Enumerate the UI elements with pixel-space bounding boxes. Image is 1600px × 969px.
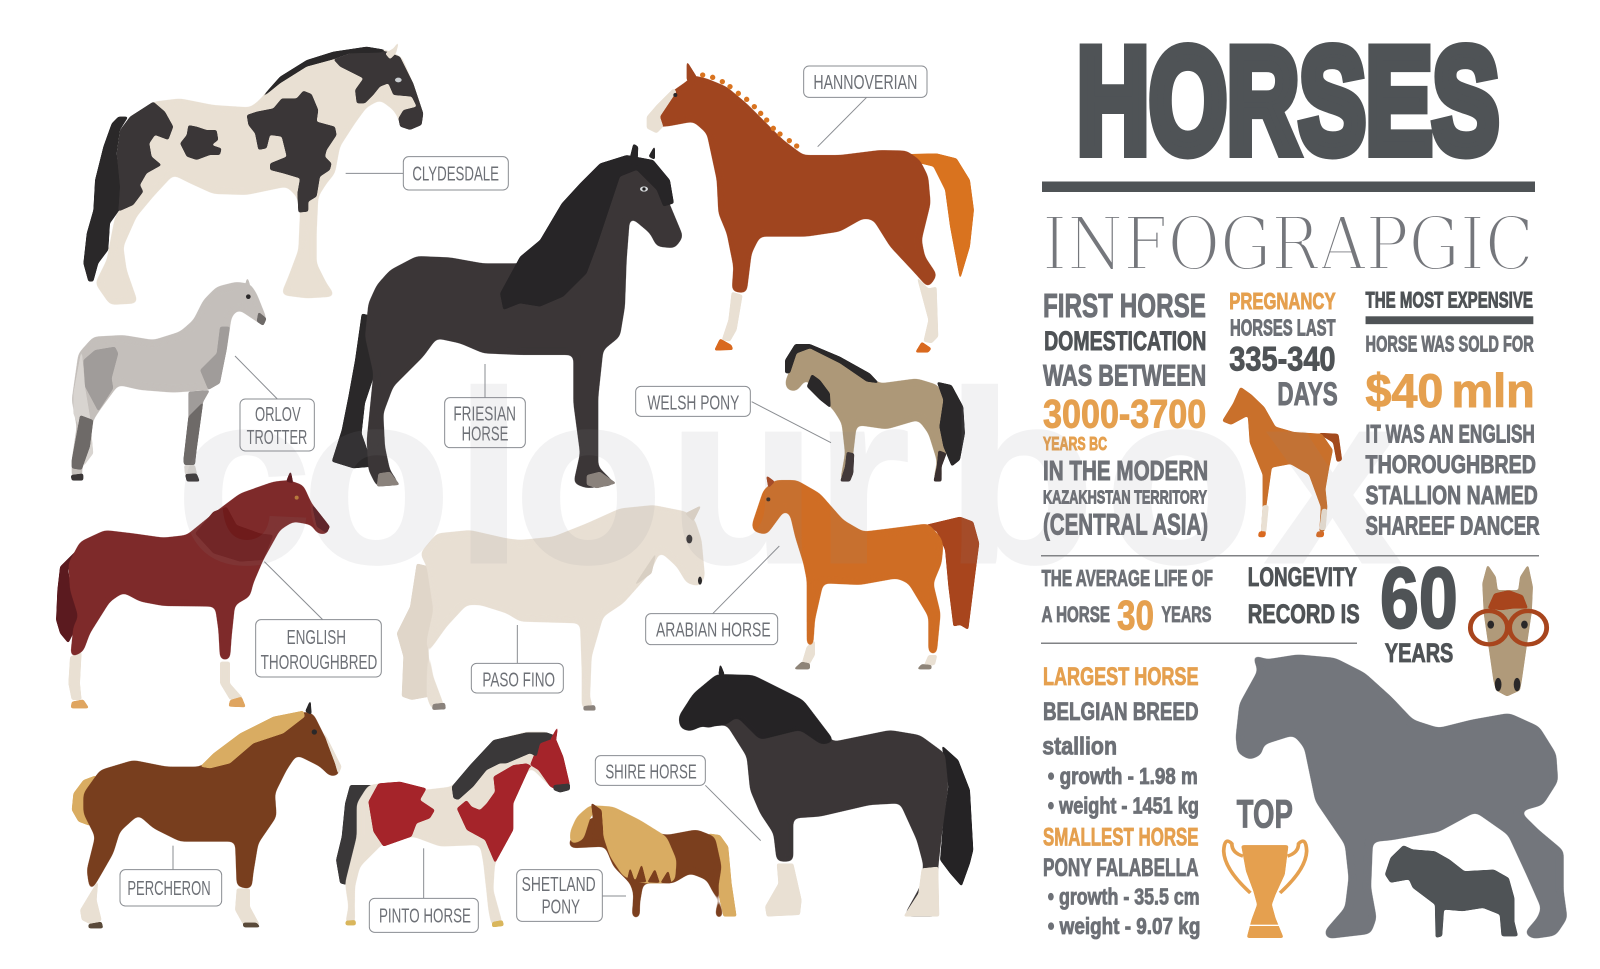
text block: longevity record: YEARS [1385, 637, 1453, 668]
label: Percheron [120, 846, 222, 906]
horse: Percheron [72, 699, 342, 928]
text block: largest and smallest horse: LARGEST HORSE [1043, 662, 1199, 691]
label: Shire Horse [595, 756, 761, 841]
text block: largest and smallest horse: PONY FALABELLA [1043, 853, 1199, 882]
text block: average life [1041, 566, 1213, 639]
label: English Thoroughbred: ENGLISH [287, 626, 346, 649]
horse: Friesian [332, 143, 683, 488]
horse: Arabian [752, 475, 979, 669]
subtitle: INFOGRAPGIC: INFOGRAPGIC [1042, 202, 1534, 288]
label: Friesian Horse: FRIESIAN [453, 403, 516, 426]
text block: average life: YEARS [1161, 602, 1211, 627]
label: English Thoroughbred: THOROUGHBRED [261, 651, 377, 674]
text block: first horse domestication: FIRST HORSE [1043, 288, 1206, 325]
text block: average life: A HORSE [1041, 602, 1110, 627]
text block: first horse domestication: WAS BETWEEN [1043, 360, 1206, 392]
text block: first horse domestication: DOMESTICATION [1044, 325, 1206, 356]
horse: Welsh Pony [785, 344, 965, 482]
text block: most expensive horse: THOROUGHBRED [1366, 451, 1536, 479]
label: Pinto Horse: PINTO HORSE [379, 905, 471, 928]
horse: Hannoverian [647, 61, 974, 353]
label: Clydesdale: CLYDESDALE [412, 163, 499, 186]
label: Orlov Trotter: TROTTER [247, 426, 307, 449]
text block: largest and smallest horse: • growth - 35.5 cm [1048, 885, 1200, 910]
text block: pregnancy: DAYS [1277, 376, 1338, 412]
silhouette: largest horse [1237, 655, 1566, 938]
text block: largest and smallest horse: stallion [1042, 732, 1117, 760]
label: Shetland Pony: SHETLAND [522, 873, 596, 896]
label: Shetland Pony: PONY [542, 895, 580, 918]
horse: Pinto [336, 725, 570, 927]
label: Welsh Pony [636, 386, 831, 443]
label: Clydesdale [346, 157, 508, 190]
horse: Shetland Pony [568, 802, 737, 918]
text block: longevity record: LONGEVITY [1248, 562, 1357, 592]
text block: most expensive horse: mln [1451, 366, 1535, 418]
label: Arabian Horse: ARABIAN HORSE [656, 619, 771, 642]
horse: Paso Fino [397, 505, 705, 711]
text block: largest and smallest horse: • weight - 1451 kg [1048, 794, 1199, 819]
horse: Clydesdale [83, 41, 423, 305]
text block: first horse domestication: IN THE MODERN [1043, 456, 1208, 487]
label: Welsh Pony: WELSH PONY [647, 391, 739, 414]
text block: pregnancy: HORSES LAST [1230, 316, 1336, 341]
label: Paso Fino [471, 625, 563, 693]
label: Pinto Horse [369, 848, 478, 932]
text block: first horse domestication: YEARS BC [1043, 434, 1107, 455]
text block: most expensive horse: STALLION NAMED [1366, 481, 1538, 510]
icon: foal [1222, 387, 1342, 537]
text block: largest and smallest horse: SMALLEST HORSE [1043, 823, 1199, 851]
text block: longevity record: 60 [1380, 551, 1458, 647]
label: Friesian Horse: HORSE [462, 423, 508, 446]
label: Hannoverian: HANNOVERIAN [813, 71, 917, 94]
horse: Shire [678, 663, 973, 917]
icon: horse head with glasses [1470, 564, 1547, 697]
text block: longevity record: RECORD IS [1248, 599, 1360, 629]
label: Percheron: PERCHERON [127, 877, 211, 900]
text block: most expensive horse [1366, 288, 1540, 540]
text block: pregnancy: 335-340 [1229, 340, 1336, 378]
text block: most expensive horse: $40 [1366, 366, 1443, 418]
text block: average life: THE AVERAGE LIFE OF [1041, 566, 1213, 592]
text block: first horse domestication [1043, 288, 1208, 541]
text block: largest and smallest horse: • growth - 1.98 m [1048, 764, 1198, 790]
label: Hannoverian [804, 66, 927, 147]
label: Friesian Horse [445, 364, 525, 448]
label: Shetland Pony [517, 870, 626, 921]
text block: pregnancy: PREGNANCY [1229, 289, 1336, 315]
text block: largest and smallest horse: BELGIAN BREED [1043, 697, 1199, 726]
label: Paso Fino: PASO FINO [482, 669, 555, 692]
text block: largest and smallest horse [1042, 662, 1200, 940]
text block: longevity record [1248, 551, 1458, 668]
label: Shire Horse: SHIRE HORSE [605, 760, 697, 783]
label: English Thoroughbred [256, 562, 381, 677]
watermark: colourbox [176, 341, 1401, 614]
heading: TOP: TOP [1237, 792, 1293, 836]
text block: first horse domestication: (CENTRAL ASIA) [1043, 509, 1208, 541]
label: Orlov Trotter [235, 356, 314, 451]
icon: trophy [1224, 841, 1307, 938]
label: Orlov Trotter: ORLOV [255, 403, 301, 426]
text block: average life: 30 [1117, 593, 1154, 639]
horse: Orlov Trotter [71, 277, 267, 482]
title rule [1042, 182, 1535, 192]
text block: largest and smallest horse: • weight - 9.07 kg [1048, 914, 1200, 940]
text block: first horse domestication: KAZAKHSTAN TERRITORY [1043, 488, 1207, 508]
label: Arabian Horse [646, 546, 779, 645]
silhouette: smallest horse [1385, 845, 1518, 938]
horse: English Thoroughbred [56, 470, 330, 708]
text block: pregnancy [1229, 289, 1338, 412]
text block: first horse domestication: 3000-3700 [1043, 391, 1206, 437]
